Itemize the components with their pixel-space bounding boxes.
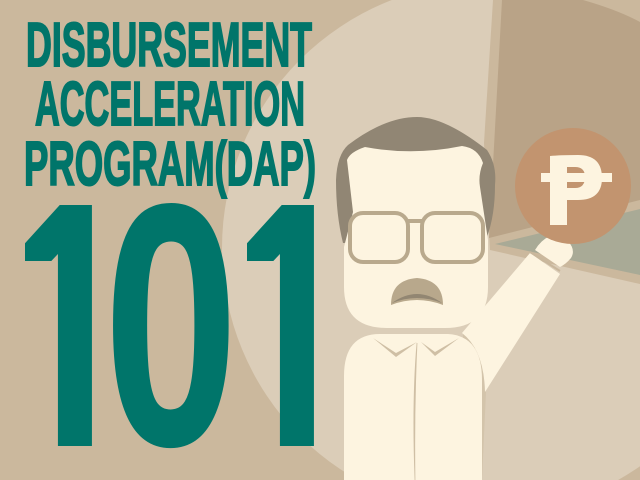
peso sign	[541, 155, 612, 225]
glasses	[350, 213, 483, 262]
body shadow	[460, 333, 486, 480]
pie slice: dark tan	[489, 0, 640, 238]
torso	[344, 334, 482, 480]
pie gap	[484, 0, 640, 284]
collar left	[373, 338, 417, 357]
title	[24, 11, 316, 199]
pie chart	[222, 0, 640, 480]
figure: man	[336, 117, 573, 480]
arm	[462, 253, 560, 392]
collar right	[421, 338, 459, 356]
mustache	[391, 278, 443, 305]
face	[344, 146, 488, 328]
shirt placket	[414, 343, 417, 480]
pie slice: large light	[222, 0, 640, 480]
pie slice: green	[495, 209, 640, 275]
hair	[336, 117, 495, 243]
title line 3: PROGRAM(DAP)	[24, 130, 316, 199]
big number 101	[25, 203, 314, 448]
wrist line	[530, 252, 560, 271]
hand	[535, 236, 573, 267]
title line 2: ACCELERATION	[35, 70, 305, 139]
title line 1: DISBURSEMENT	[26, 11, 312, 80]
coin	[515, 128, 631, 244]
mustache shadow	[392, 294, 442, 303]
